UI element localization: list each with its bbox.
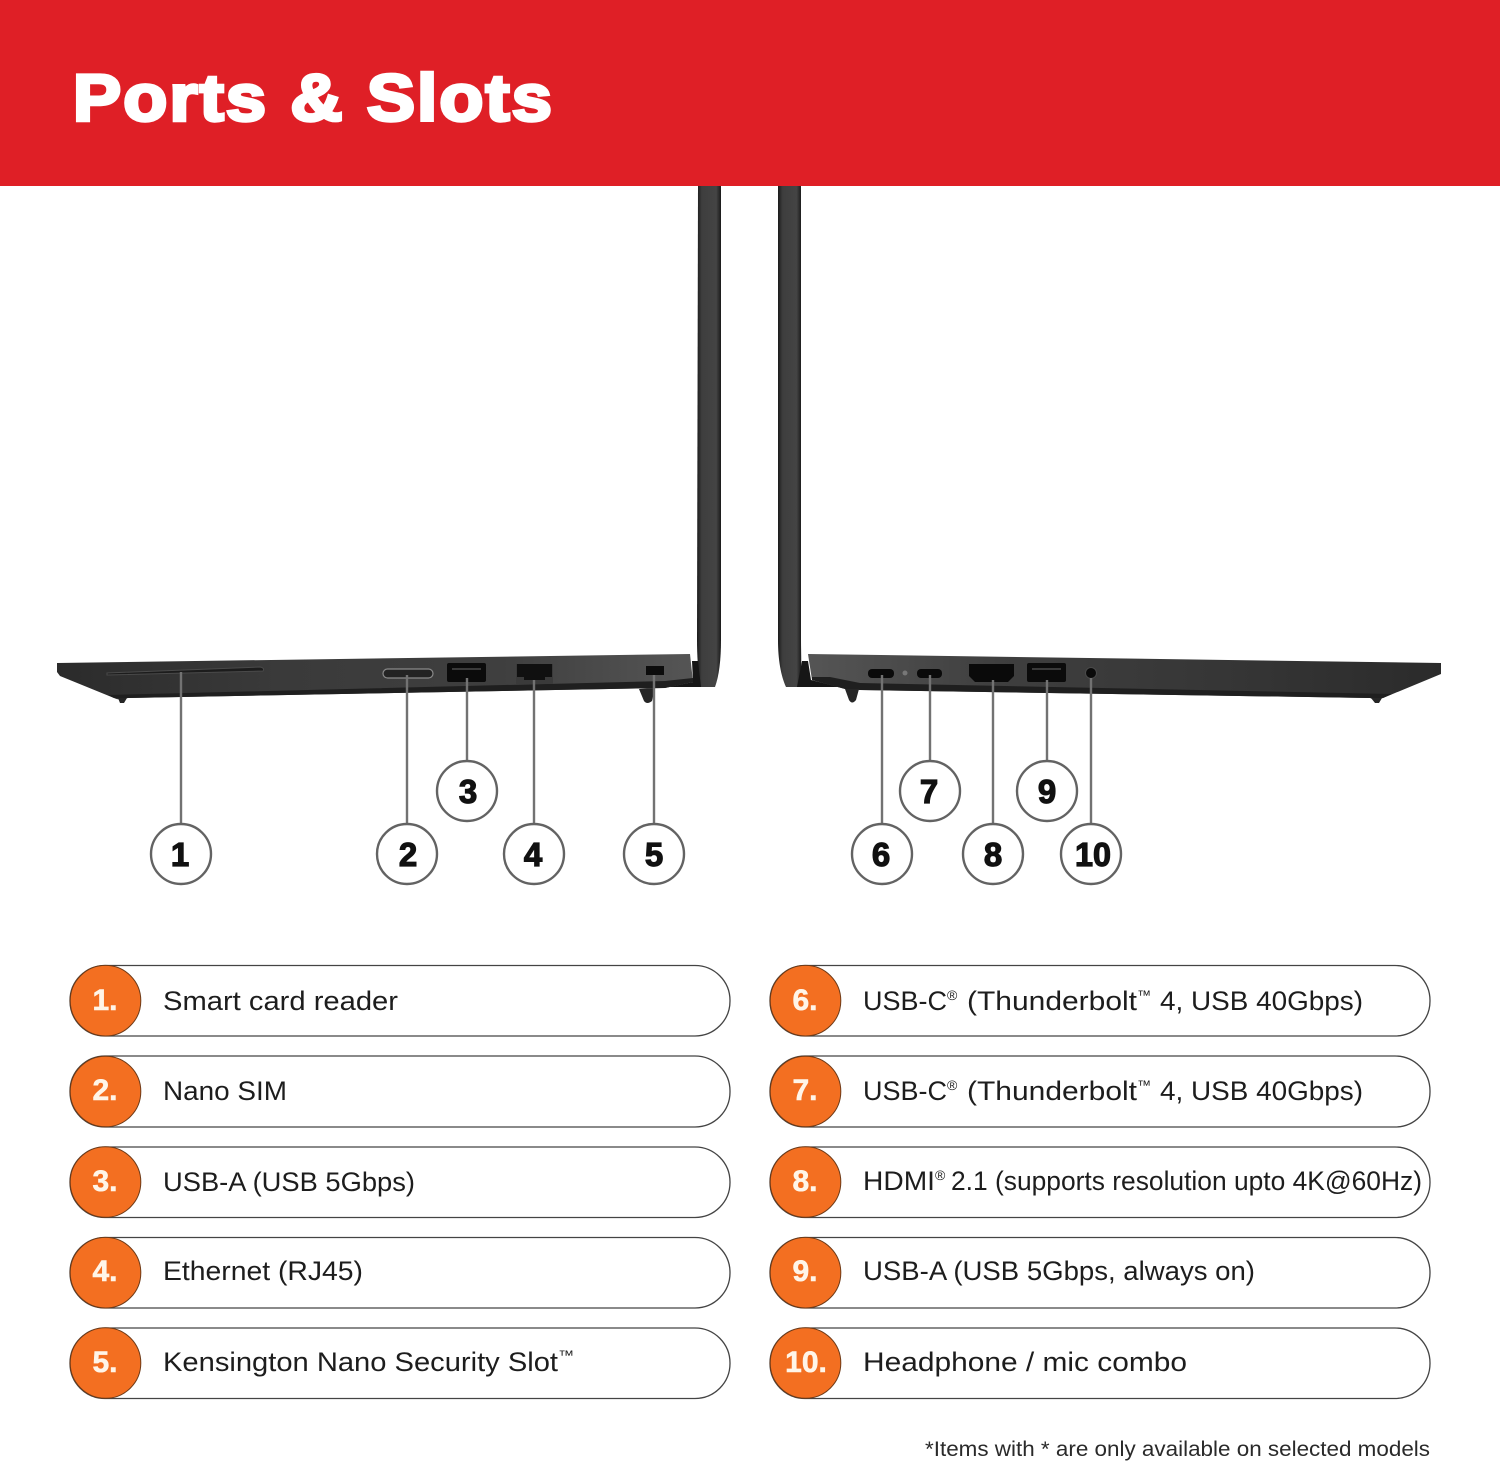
callout 10 (1061, 824, 1121, 884)
legend row 6: (Thunderbolt (967, 986, 1138, 1016)
legend row 9: 9. (792, 1255, 818, 1288)
legend row 2: Nano SIM (163, 1076, 287, 1106)
legend row 8: HDMI (863, 1166, 935, 1196)
legend row 3: 3. (92, 1165, 118, 1198)
HDMI port (969, 664, 1014, 682)
callout 3: 3 (459, 773, 477, 810)
USB-A port left (447, 663, 486, 682)
legend row 7: 7. (792, 1074, 818, 1107)
callout 3 (437, 761, 497, 821)
laptop: left side view (57, 186, 721, 703)
USB-C port 7 (917, 669, 942, 678)
title: Ports & Slots (73, 60, 554, 134)
legend row 3: USB-A (USB 5Gbps) (163, 1167, 415, 1197)
legend row 6: ™ (1137, 987, 1151, 1003)
legend row 6: USB-C (863, 986, 947, 1016)
base right (808, 654, 1441, 700)
legend row 6: 4, USB 40Gbps) (1160, 986, 1363, 1016)
foot right (845, 689, 1382, 703)
legend row 8: ® (935, 1167, 946, 1183)
callout 2: 2 (399, 836, 417, 873)
legend row 5: Kensington Nano Security Slot (163, 1347, 559, 1377)
legend row 10: Headphone / mic combo (863, 1347, 1187, 1377)
legend row 8: 8. (792, 1165, 818, 1198)
legend row 4 (70, 1237, 730, 1308)
hinge wedge right (797, 661, 840, 687)
callout 10: 10 (1075, 836, 1111, 873)
callout lines (181, 672, 1091, 824)
callout 8 (963, 824, 1023, 884)
callout 1 (151, 824, 211, 884)
legend row 8: 2.1 (supports resolution upto 4K@60Hz) (951, 1166, 1422, 1196)
legend row 7: ® (947, 1077, 958, 1093)
legend row 5: ™ (558, 1347, 574, 1363)
legend row 5 (70, 1328, 730, 1398)
legend row 7: (Thunderbolt (967, 1076, 1138, 1106)
USB-A port right (1027, 663, 1066, 682)
callout 7: 7 (920, 773, 938, 810)
legend row 10: 10. (785, 1346, 827, 1379)
laptop: right side view (778, 186, 1441, 703)
legend row 5: 5. (92, 1346, 118, 1379)
headphone jack (1086, 668, 1096, 678)
callout 5 (624, 824, 684, 884)
USB-C port 6 (868, 669, 894, 678)
callout 5: 5 (645, 836, 663, 873)
legend row 1: Smart card reader (163, 986, 398, 1016)
legend row 7: 4, USB 40Gbps) (1160, 1076, 1363, 1106)
callout 4: 4 (524, 836, 543, 873)
smart card slot (107, 667, 264, 675)
legend row 6 (770, 965, 1430, 1036)
legend row 6: ® (947, 987, 958, 1003)
callout 9 (1017, 761, 1077, 821)
callout 2 (377, 824, 437, 884)
callout 8: 8 (984, 836, 1002, 873)
legend row 10 (770, 1328, 1430, 1398)
callout 6: 6 (872, 836, 890, 873)
ethernet port (516, 664, 553, 684)
screen right (778, 186, 801, 687)
callout 4 (504, 824, 564, 884)
legend row 4: Ethernet (RJ45) (163, 1256, 363, 1286)
screen left (697, 186, 721, 687)
LED dot (902, 670, 908, 676)
legend row 1: 1. (92, 984, 118, 1017)
legend row 2: 2. (92, 1074, 118, 1107)
callout 6 (852, 824, 912, 884)
hinge wedge left (668, 661, 701, 687)
base left (57, 654, 693, 700)
legend row 9: USB-A (USB 5Gbps, always on) (863, 1256, 1255, 1286)
legend row 7: ™ (1137, 1077, 1151, 1093)
legend row 8 (770, 1147, 1430, 1218)
Kensington slot (646, 666, 664, 675)
legend row 2 (70, 1056, 730, 1127)
legend row 7 (770, 1056, 1430, 1127)
foot left (118, 688, 655, 703)
header banner (0, 0, 1500, 186)
footnote: *Items with * are only available on selected models (925, 1438, 1430, 1461)
callout 1: 1 (171, 836, 189, 873)
legend row 6: 6. (792, 984, 818, 1017)
legend row 3 (70, 1147, 730, 1218)
nano SIM slot (383, 669, 433, 678)
legend row 4: 4. (92, 1255, 118, 1288)
legend row 1 (70, 965, 730, 1036)
legend row 9 (770, 1237, 1430, 1308)
callout 9: 9 (1038, 773, 1056, 810)
callout 7 (900, 761, 960, 821)
legend row 7: USB-C (863, 1076, 947, 1106)
